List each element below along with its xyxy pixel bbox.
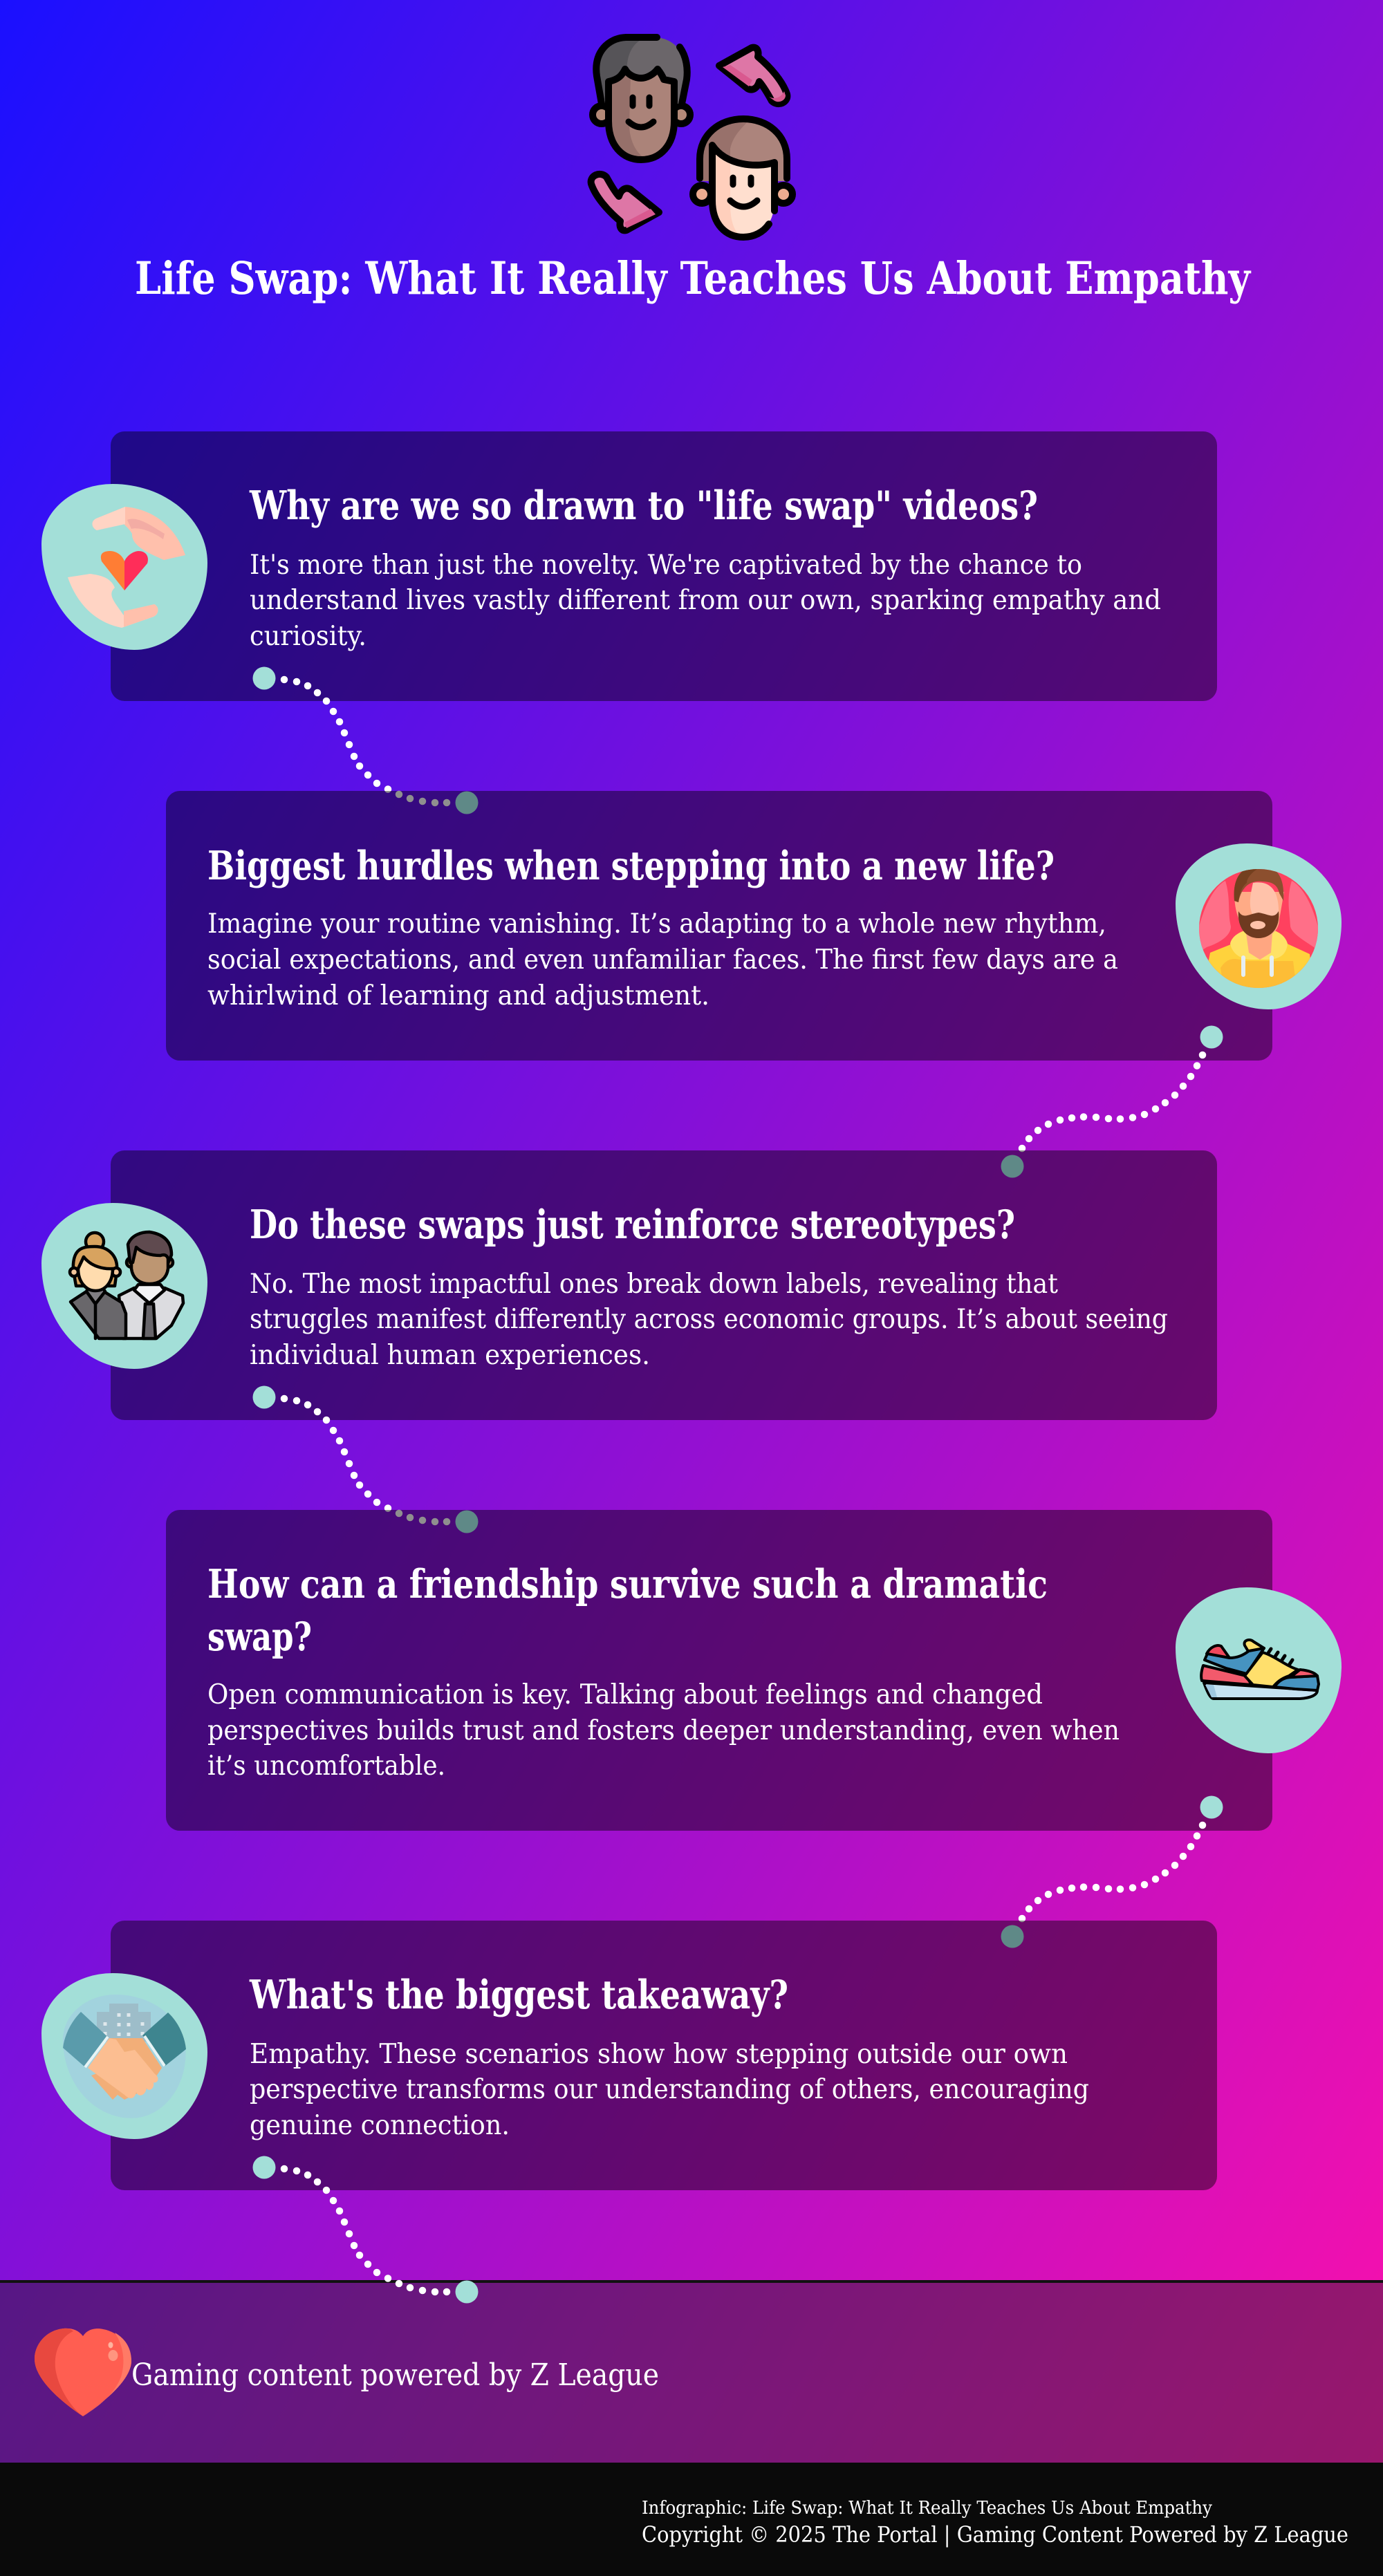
text block: card 5: genuine connection. — [250, 2110, 510, 2141]
arrow: dotted connector 1 — [253, 666, 479, 814]
text block: card 1 — [250, 550, 1161, 652]
heading: card 1: Why are we so drawn to "life swap" videos? — [249, 483, 1038, 529]
icon: bearded man in hoodie — [1176, 843, 1342, 1009]
text block: card 1: understand lives vastly different from our own, sparking empathy and — [250, 585, 1161, 616]
heading: card 3: Do these swaps just reinforce stereotypes? — [250, 1202, 1015, 1248]
text block: card 2: Imagine your routine vanishing. It’s adapting to a whole new rhythm, — [207, 908, 1106, 940]
panel: footer band — [0, 2280, 1383, 2463]
panel: card 2 — [166, 791, 1342, 1061]
panel: card 3 — [41, 1150, 1217, 1420]
text block: card 1: curiosity. — [250, 621, 366, 652]
heading: card 4: How can a friendship survive such a dramatic — [207, 1561, 1048, 1607]
icon: sneaker — [1176, 1587, 1342, 1753]
text block: card 2: social expectations, and even unfamiliar faces. The first few days are a — [207, 944, 1118, 976]
icon: light-haired face — [693, 119, 792, 237]
arrow: dotted connector 2 — [1001, 1026, 1223, 1178]
text block: card 4: Open communication is key. Talking about feelings and changed — [207, 1679, 1043, 1710]
text block: card 5: perspective transforms our understanding of others, encouraging — [250, 2074, 1089, 2105]
text block: card 2 — [207, 908, 1118, 1011]
text block: card 3: No. The most impactful ones break down labels, revealing that — [250, 1269, 1058, 1300]
text block: card 3: struggles manifest differently across economic groups. It’s about seeing — [250, 1304, 1168, 1335]
heading: card 4: swap? — [207, 1614, 312, 1660]
text block: card 5 — [250, 2039, 1089, 2141]
icon part: woman — [70, 1233, 126, 1338]
panel: card 1 — [41, 431, 1217, 701]
text block: card 5: Empathy. These scenarios show how stepping outside our own — [250, 2039, 1068, 2070]
panel: copyright footer — [0, 2463, 1383, 2576]
icon: dark-haired face — [593, 37, 690, 160]
panel: card 4 — [166, 1510, 1342, 1831]
text block: card 4 — [207, 1679, 1120, 1782]
text block: card 1: It's more than just the novelty. We're captivated by the chance to — [250, 550, 1082, 581]
text block: card 4: it’s uncomfortable. — [207, 1751, 445, 1782]
icon: handshake with buildings — [41, 1973, 207, 2139]
heading: card 2: Biggest hurdles when stepping into a new life? — [207, 843, 1055, 889]
arrow: dotted connector 5 — [253, 2156, 479, 2304]
panel: card 5 — [41, 1921, 1217, 2190]
footer tagline: Gaming content powered by Z League — [131, 2358, 659, 2393]
text block: card 3: individual human experiences. — [250, 1340, 650, 1371]
header icon: two faces swapping — [591, 37, 792, 237]
text block: card 3 — [250, 1269, 1168, 1371]
icon part: man — [119, 1232, 183, 1338]
icon: hands holding a heart — [41, 484, 207, 650]
text block: card 4: perspectives builds trust and fosters deeper understanding, even when — [207, 1715, 1120, 1746]
text block: card 2: whirlwind of learning and adjustment. — [207, 980, 709, 1011]
icon: top-right swap arrow — [719, 48, 787, 104]
icon: two professionals — [41, 1203, 207, 1369]
arrow: dotted connector 4 — [1001, 1796, 1223, 1948]
heading: card 4 — [207, 1561, 1048, 1660]
arrow: dotted connector 3 — [253, 1385, 479, 1533]
footer caption: Infographic: Life Swap: What It Really Teaches Us About Empathy — [642, 2498, 1212, 2519]
icon: heart — [35, 2328, 131, 2416]
heading: card 5: What's the biggest takeaway? — [249, 1972, 788, 2018]
icon: bottom-left swap arrow — [591, 174, 659, 230]
